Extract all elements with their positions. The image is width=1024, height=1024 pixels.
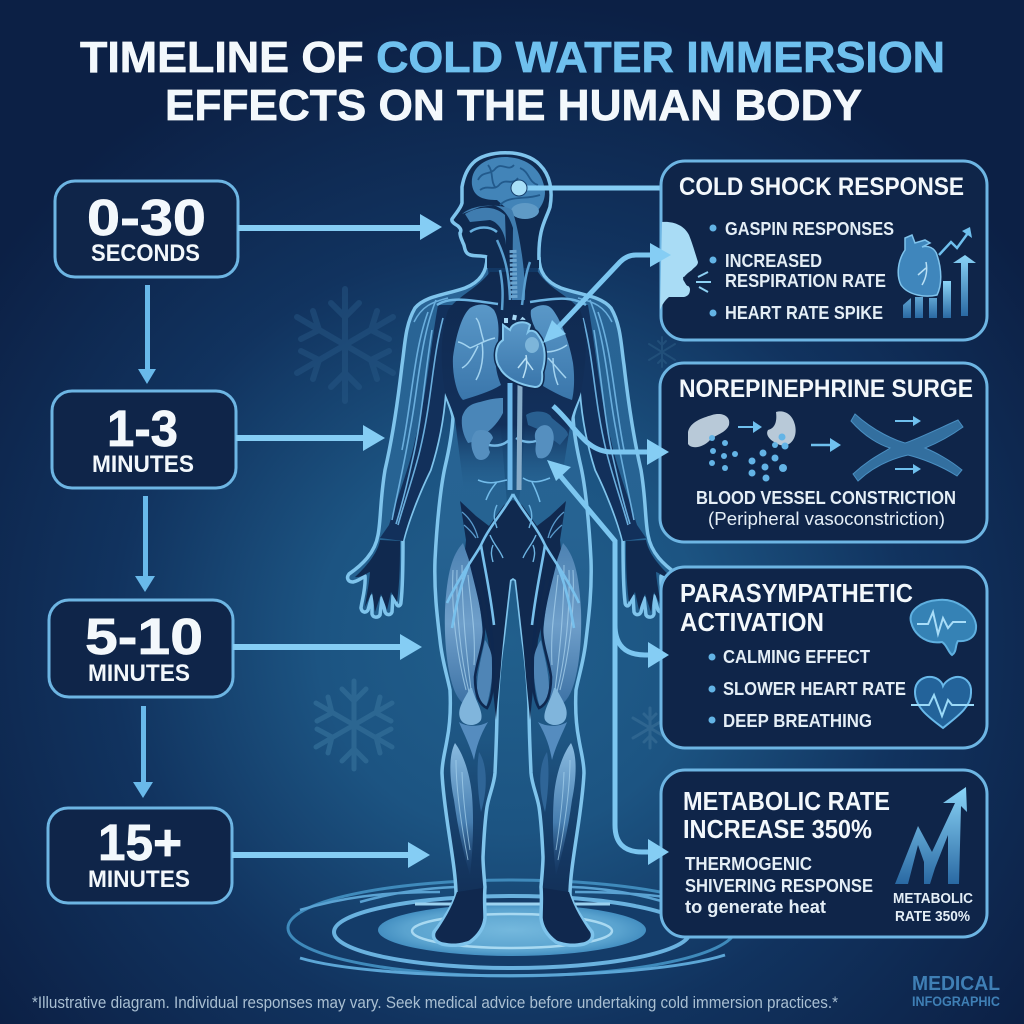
- title: TIMELINE OF COLD WATER IMMERSION: [80, 33, 945, 82]
- timeline box: 15+ minutes: MINUTES: [88, 866, 190, 893]
- icon: metabolic chart: [895, 787, 967, 884]
- timeline box: 1-3 minutes: [52, 391, 236, 488]
- heading: METABOLIC RATE: [683, 786, 890, 816]
- heart: [496, 315, 545, 387]
- watermark: INFOGRAPHIC: [912, 994, 1000, 1009]
- human body: [348, 153, 678, 945]
- bullet list: [708, 647, 906, 731]
- title: EFFECTS ON THE HUMAN BODY: [165, 81, 862, 130]
- timeline box: 15+ minutes: [48, 808, 232, 903]
- title: [80, 33, 945, 130]
- airway and spine: [462, 206, 530, 310]
- bullet list: CALMING EFFECT: [723, 647, 870, 667]
- body right half: [513, 257, 678, 945]
- timeline box: 0-30 seconds: SECONDS: [91, 240, 200, 267]
- panel: metabolic rate increase: [661, 770, 987, 937]
- connector: body to norepinephrine panel: [553, 406, 669, 465]
- body left half: [348, 257, 513, 945]
- bullet list: INCREASED: [725, 251, 822, 271]
- heading: INCREASE 350%: [683, 814, 872, 844]
- connector: heart to face double arrow: [543, 243, 671, 343]
- kidneys: [471, 425, 554, 460]
- bullet list: HEART RATE SPIKE: [725, 303, 883, 323]
- bullet list: RESPIRATION RATE: [725, 271, 886, 291]
- caption: BLOOD VESSEL CONSTRICTION: [696, 487, 956, 508]
- bullet list: SLOWER HEART RATE: [723, 679, 906, 699]
- timeline box: 5-10 minutes: [49, 600, 233, 697]
- body text: THERMOGENIC: [685, 854, 812, 874]
- caption: (Peripheral vasoconstriction): [708, 508, 945, 529]
- heading: COLD SHOCK RESPONSE: [679, 173, 964, 201]
- heading: ACTIVATION: [680, 609, 824, 637]
- heading: PARASYMPATHETIC: [680, 580, 913, 608]
- watermark: [912, 973, 1000, 1009]
- footer disclaimer: *Illustrative diagram. Individual responses may vary. Seek medical advice before undertaking cold immersion practices.*: [32, 993, 838, 1012]
- torso dark core: [442, 272, 586, 490]
- icon: adrenal glands and particles: [688, 411, 796, 482]
- connector: brain to cold shock panel: [511, 180, 661, 196]
- small chart label: RATE 350%: [895, 909, 970, 925]
- watermark: MEDICAL: [912, 973, 1000, 995]
- water ripples: [288, 880, 736, 976]
- body text: [685, 854, 873, 917]
- icon: heart with rising chart: [898, 227, 976, 318]
- panel: parasympathetic activation: [661, 567, 987, 748]
- shoulder vessels: [437, 299, 586, 305]
- bullet list: DEEP BREATHING: [723, 711, 872, 731]
- heading: NOREPINEPHRINE SURGE: [679, 375, 973, 403]
- brain: [472, 157, 545, 219]
- snowflake: upper left: [297, 289, 393, 401]
- icon: heart with pulse: [911, 677, 974, 728]
- bullet list: [710, 219, 894, 323]
- left lung: [453, 304, 501, 400]
- timeline box: 1-3 minutes: 1-3: [107, 400, 178, 457]
- timeline box: 0-30 seconds: 0-30: [87, 189, 206, 246]
- liver and stomach: [462, 398, 568, 445]
- aorta and abdominal vessels: [478, 383, 550, 502]
- icon: face gasping: [660, 222, 711, 310]
- timeline box: 0-30 seconds: [55, 181, 238, 277]
- body text: SHIVERING RESPONSE: [685, 876, 873, 896]
- timeline box: 5-10 minutes: 5-10: [85, 608, 203, 665]
- connector: kidneys to lower panels: [547, 460, 669, 865]
- panel: cold shock response: [660, 161, 987, 340]
- heading: [680, 580, 913, 637]
- icon: constricted blood vessels: [851, 414, 963, 481]
- timeline vertical arrows: [133, 285, 156, 798]
- timeline box: 1-3 minutes: MINUTES: [92, 451, 194, 478]
- arrow: to vessels: [811, 438, 841, 452]
- snowflake: small lower right: [633, 708, 667, 748]
- heading: [683, 786, 890, 844]
- panel: norepinephrine surge: [660, 363, 987, 542]
- small chart label: METABOLIC: [893, 891, 973, 907]
- head: [452, 153, 551, 268]
- icon: brain with pulse: [911, 600, 976, 655]
- snowflake: small upper right: [649, 337, 675, 367]
- small chart label: [893, 891, 973, 925]
- right lung: [531, 305, 574, 400]
- timeline box: 15+ minutes: 15+: [98, 814, 182, 871]
- bullet list: GASPIN RESPONSES: [725, 219, 894, 239]
- timeline horizontal arrows: [232, 214, 442, 868]
- body text: to generate heat: [685, 897, 826, 917]
- snowflake: lower left: [316, 681, 392, 769]
- caption: [696, 487, 956, 529]
- timeline box: 5-10 minutes: MINUTES: [88, 660, 190, 687]
